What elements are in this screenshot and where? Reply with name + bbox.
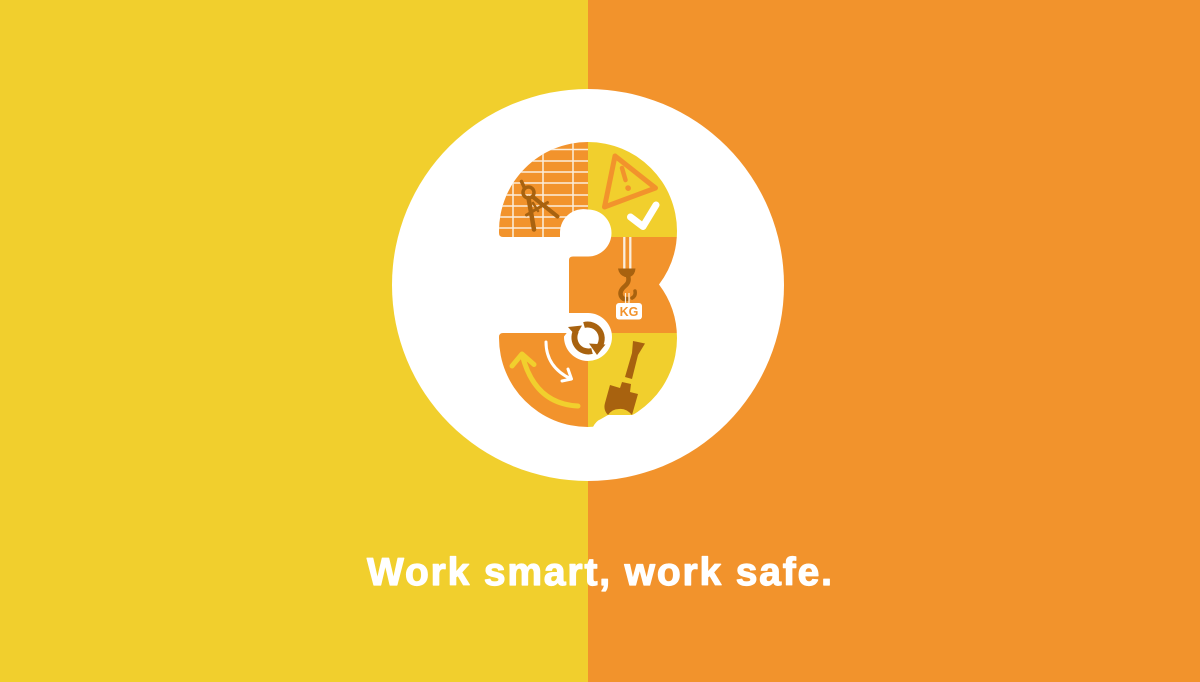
lower notch with rotate icon [564, 313, 612, 361]
icon: curved yellow arrow [512, 354, 578, 406]
quadrant: lower right yellow [588, 333, 680, 430]
upper notch of the numeral [560, 209, 612, 260]
white circle badge [392, 89, 784, 481]
icon: crane hook with KG weight [616, 237, 642, 320]
panel: orange right background [588, 0, 1200, 682]
quadrant: middle orange [565, 237, 680, 333]
icon: crane hook with KG weight: KG [620, 305, 638, 319]
quadrant: lower left orange [495, 333, 588, 430]
infographic canvas [0, 0, 830, 682]
icon: shovel [604, 341, 645, 415]
dirt mound [588, 412, 640, 432]
icon: check mark [630, 205, 656, 226]
tagline: Work smart, work safe. [367, 551, 832, 594]
icon: curved white arrow [546, 342, 572, 381]
icon: drafting compass [522, 182, 558, 230]
panel: yellow left background [0, 0, 588, 682]
quadrant: upper left orange with grid [495, 138, 588, 237]
numeral 3 built from coloured quadrants [495, 138, 680, 432]
quadrant: upper right yellow [588, 138, 680, 237]
icon: warning triangle [604, 156, 656, 207]
